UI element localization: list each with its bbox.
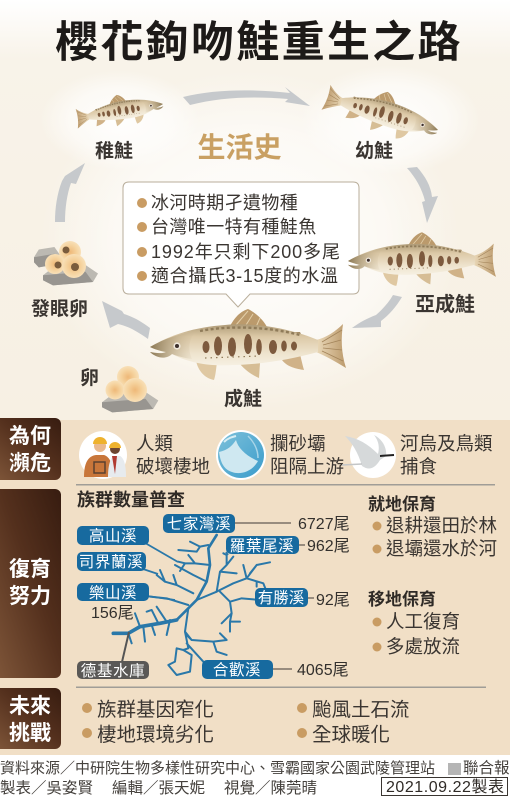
panel tab: conservation: 努力 <box>9 585 51 608</box>
callout: facts: 1992年只剩下200多尾 <box>151 242 340 262</box>
footer: credits: 視覺／陳莞晴 <box>224 779 317 797</box>
label: Sijielan: 司界蘭溪 <box>79 553 143 571</box>
panel tab: future challenges: 未來 <box>9 695 51 718</box>
text: birds <box>400 433 493 477</box>
label: Deji reservoir: 德基水庫 <box>81 662 145 680</box>
text: human damage: 人類 <box>136 433 173 454</box>
tributary leaders <box>140 540 228 600</box>
footer: credits <box>0 779 317 797</box>
panel: lower tan background <box>0 420 510 755</box>
label: adult: 成鮭 <box>224 387 262 410</box>
list: future challenges: 棲地環境劣化 <box>97 724 214 746</box>
text block: ex situ conservation: 移地保育 <box>368 589 436 609</box>
fish: subadult <box>348 232 496 286</box>
footer: credits: 編輯／張天妮 <box>112 779 205 797</box>
number: 156: 156尾 <box>91 605 134 622</box>
label: Yousheng: 有勝溪 <box>258 589 304 607</box>
fish: fry <box>73 87 166 134</box>
number: 92: 92尾 <box>316 592 350 609</box>
text: human damage: 破壞棲地 <box>136 456 210 477</box>
chart: river map <box>77 514 350 680</box>
text: dams: 攔砂壩 <box>270 433 326 454</box>
number: 4065: 4065尾 <box>297 662 349 679</box>
arrow: fry to juvenile <box>183 87 310 106</box>
panel tab: why endangered <box>0 418 61 480</box>
label: Gaoshan: 高山溪 <box>89 527 137 545</box>
title: 櫻花鉤吻鮭重生之路 <box>55 19 463 67</box>
arrow: subadult to adult <box>352 295 402 328</box>
number: 962: 962尾 <box>307 538 350 555</box>
panel tab: future challenges: 挑戰 <box>9 722 51 745</box>
callout: facts: 適合攝氏3-15度的水溫 <box>151 266 338 286</box>
text block: ex situ conservation: 人工復育 <box>386 611 460 632</box>
label: Luoyewei: 羅葉尾溪 <box>230 537 294 555</box>
text: dams: 阻隔上游 <box>270 456 344 477</box>
panel tab: future challenges <box>0 688 61 749</box>
river network <box>113 535 270 675</box>
icon: bird <box>342 432 396 478</box>
arrow: juvenile to subadult <box>407 167 438 223</box>
label: Qijiawan: 七家灣溪 <box>167 515 231 533</box>
list: future challenges: 颱風土石流 <box>312 699 410 721</box>
section heading: life cycle: 生活史 <box>197 132 282 163</box>
arrow: eyed egg to fry <box>55 163 85 222</box>
list: future challenges: 全球暖化 <box>312 724 390 746</box>
text: dams <box>270 433 344 477</box>
panel tab: why endangered: 瀕危 <box>9 452 51 475</box>
icon: workers <box>79 431 127 479</box>
footer: source: 聯合報 <box>463 759 510 777</box>
text: birds: 捕食 <box>400 456 437 477</box>
fish: juvenile <box>319 76 444 149</box>
panel tab: why endangered: 為何 <box>9 425 51 448</box>
fish: adult <box>150 309 346 380</box>
label: juvenile: 幼鮭 <box>355 140 393 162</box>
callout: facts <box>123 182 359 307</box>
date stamp: 2021.09.22製表 <box>386 778 504 796</box>
icon: water <box>216 430 266 480</box>
text block: ex situ conservation: 多處放流 <box>386 636 460 657</box>
panel tab: conservation <box>0 489 61 678</box>
callout: facts: 台灣唯一特有種鮭魚 <box>151 217 317 237</box>
text block: in situ conservation: 就地保育 <box>368 494 436 514</box>
text block: in situ conservation <box>368 494 497 559</box>
heading: population census: 族群數量普查 <box>77 489 185 510</box>
label: fry: 稚鮭 <box>95 140 133 162</box>
reservoir connector <box>122 632 129 662</box>
label: egg: 卵 <box>80 367 99 389</box>
label: Hehuan: 合歡溪 <box>213 661 261 679</box>
footer: credits: 製表／吳姿賢 <box>0 779 93 797</box>
icon: eggs <box>102 366 158 412</box>
label: subadult: 亞成鮭 <box>415 292 475 316</box>
icon: eyed eggs <box>34 241 98 285</box>
label: Leshan: 樂山溪 <box>89 584 137 602</box>
arrow: adult to eyed egg <box>102 301 150 339</box>
callout: facts: 冰河時期孑遺物種 <box>151 193 298 213</box>
label: Gaoshan <box>77 526 149 545</box>
text: birds: 河烏及鳥類 <box>400 433 493 454</box>
number: 6727: 6727尾 <box>298 516 350 533</box>
label: eyed egg: 發眼卵 <box>31 298 88 320</box>
label: Leshan <box>77 583 149 602</box>
text: human damage <box>136 433 210 477</box>
list: future challenges <box>82 699 410 746</box>
list: future challenges: 族群基因窄化 <box>97 699 214 721</box>
label: Hehuan <box>202 660 273 679</box>
text block: ex situ conservation <box>368 589 460 657</box>
panel tab: conservation: 復育 <box>9 557 51 581</box>
footer: source: 資料來源／中研院生物多樣性研究中心、雪霸國家公園武陵管理站 <box>0 759 435 777</box>
text block: in situ conservation: 退壩還水於河 <box>386 538 497 559</box>
page background <box>0 0 510 420</box>
text block: in situ conservation: 退耕還田於林 <box>386 515 497 536</box>
